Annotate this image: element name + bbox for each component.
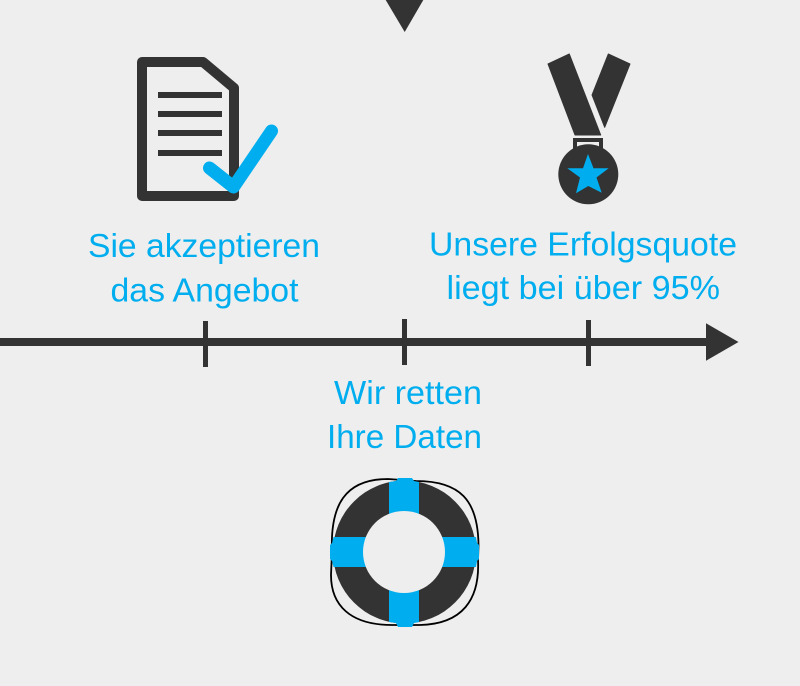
text: Wir retten Ihre Daten xyxy=(327,374,482,455)
text: Unsere Erfolgsquote liegt bei über 95% xyxy=(429,226,737,306)
text: Wir retten Ihre Daten: Wir retten xyxy=(334,374,482,411)
arrow: top pointer xyxy=(386,0,423,32)
text: Sie akzeptieren das Angebot xyxy=(88,227,320,308)
icon: document with check mark xyxy=(142,62,272,196)
timeline axis with arrow and ticks xyxy=(0,319,738,367)
text: Sie akzeptieren das Angebot: das Angebot xyxy=(110,272,298,308)
text: Unsere Erfolgsquote liegt bei über 95%: Unsere Erfolgsquote xyxy=(429,226,737,262)
icon: medal with star xyxy=(548,54,630,204)
text: Wir retten Ihre Daten: Ihre Daten xyxy=(327,418,482,455)
text: Sie akzeptieren das Angebot: Sie akzeptieren xyxy=(88,227,320,264)
icon: life ring xyxy=(330,478,479,627)
text: Unsere Erfolgsquote liegt bei über 95%: liegt bei über 95% xyxy=(446,269,720,306)
